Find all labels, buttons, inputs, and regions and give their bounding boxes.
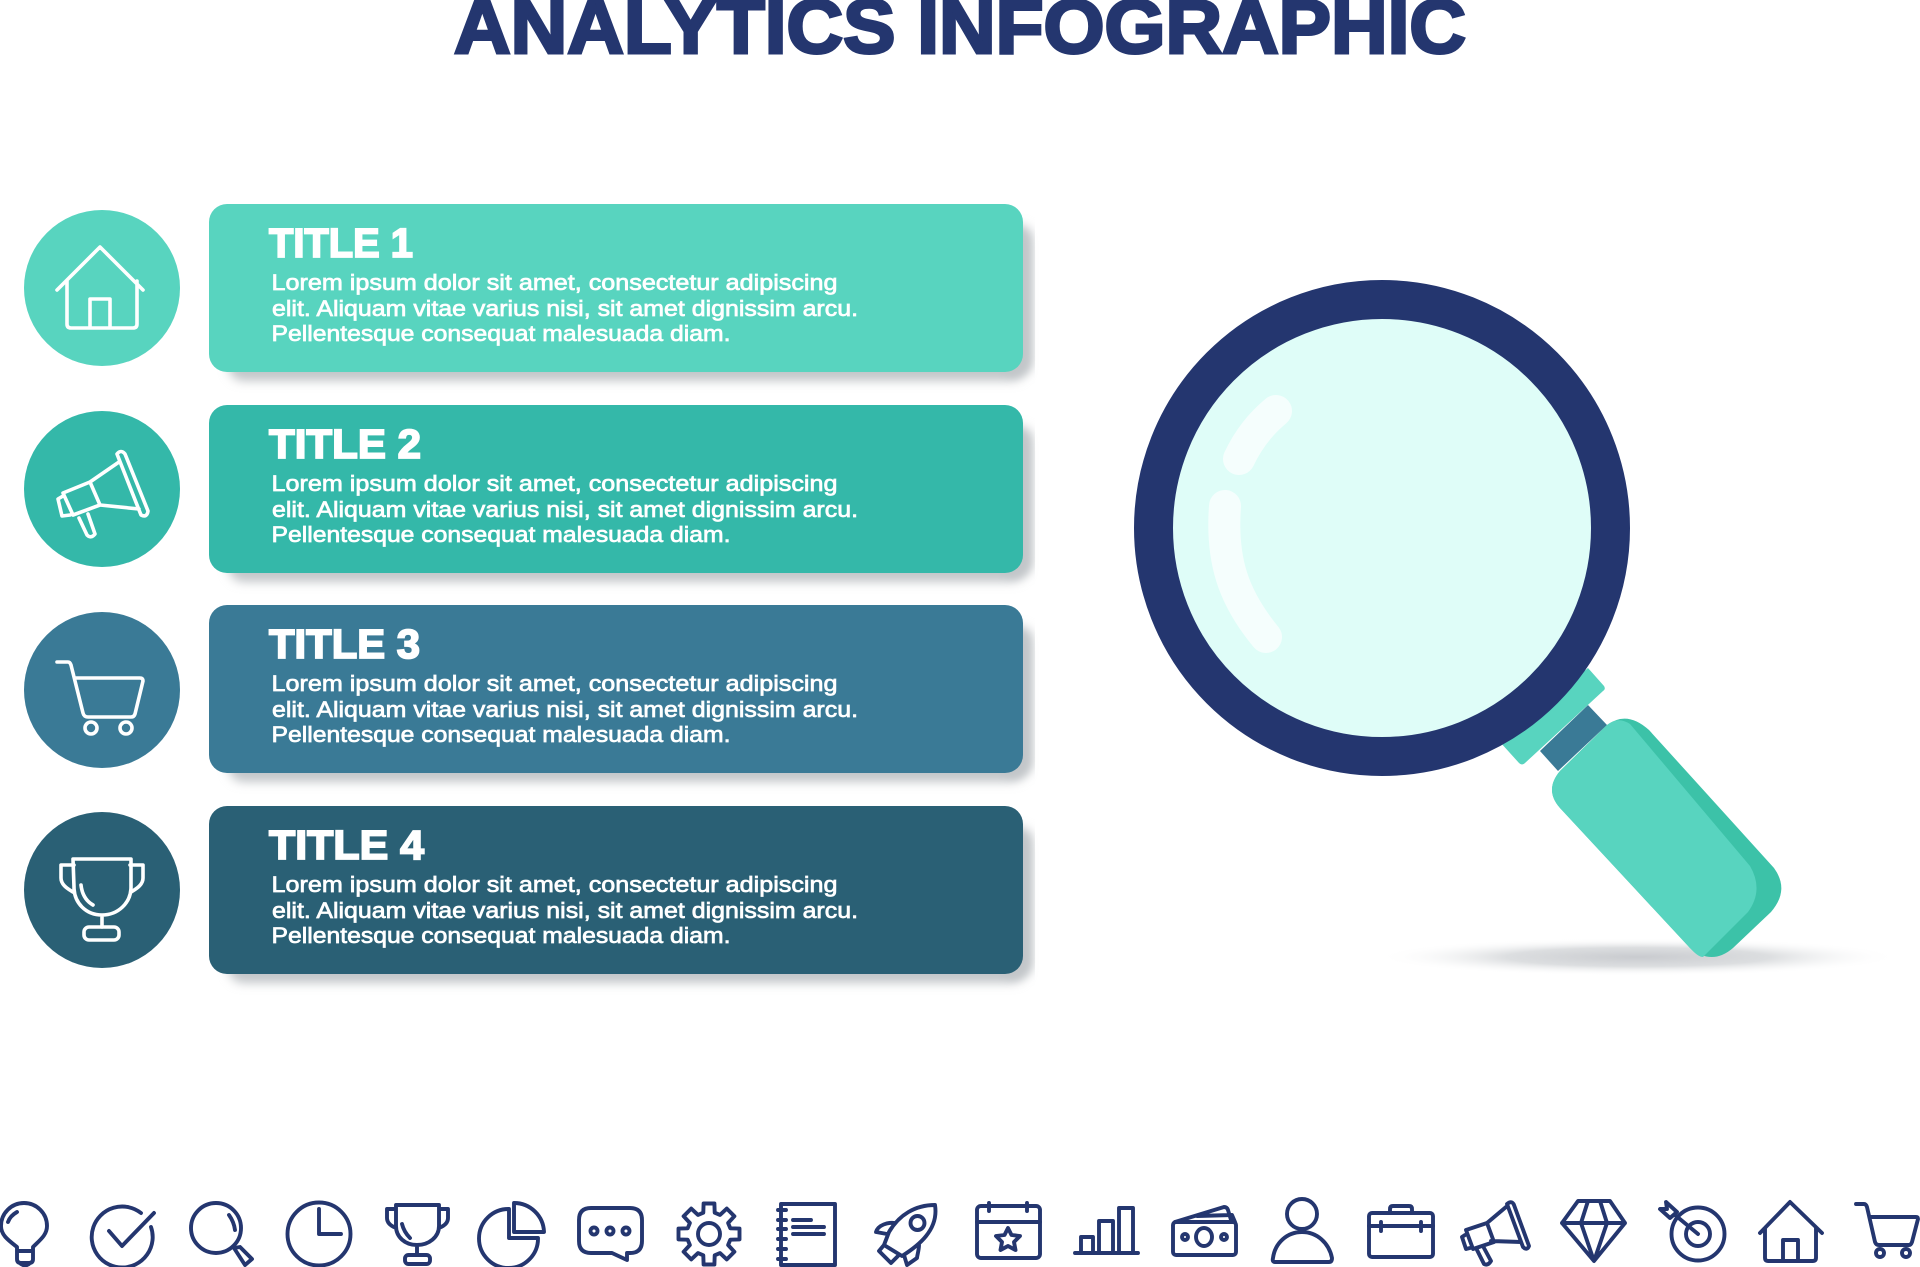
panel: title 2 row bbox=[24, 405, 1033, 582]
panel: title 1 row: Lorem ipsum dolor sit amet, consectetur adipiscing bbox=[272, 270, 838, 295]
icon: money bbox=[1173, 1207, 1236, 1255]
panel: title 1 row: TITLE 1 bbox=[269, 220, 413, 266]
magnifier collar bbox=[1500, 668, 1605, 764]
panel: title 3 row: Lorem ipsum dolor sit amet, consectetur adipiscing bbox=[272, 671, 838, 696]
icon: trophy outline bbox=[387, 1205, 448, 1264]
panel: title 1 row: elit. Aliquam vitae varius nisi, sit amet dignissim arcu. bbox=[272, 296, 858, 321]
icon row bbox=[1, 1199, 1918, 1267]
lens highlights bbox=[1224, 411, 1276, 637]
panel: title 3 row: Pellentesque consequat malesuada diam. bbox=[272, 722, 730, 747]
icon: pie chart bbox=[479, 1203, 544, 1267]
panel: title 3 row: TITLE 3 bbox=[269, 621, 420, 667]
panel: title 4 row: TITLE 4 bbox=[269, 822, 424, 868]
magnifier ring and lens bbox=[1154, 300, 1610, 756]
panel: title 3 row bbox=[24, 605, 1033, 782]
panel: title 2 row: Pellentesque consequat malesuada diam. bbox=[272, 522, 730, 547]
icon: shopping cart bbox=[57, 662, 143, 734]
icon: rocket bbox=[876, 1205, 935, 1265]
magnifier handle bbox=[1552, 719, 1781, 957]
icon: speech bubble bbox=[579, 1208, 642, 1260]
panel: title 4 row: elit. Aliquam vitae varius nisi, sit amet dignissim arcu. bbox=[272, 898, 858, 923]
icon: cart outline bbox=[1856, 1204, 1918, 1257]
panel: title 2 row: TITLE 2 bbox=[269, 421, 421, 467]
panel: title 2 row: elit. Aliquam vitae varius nisi, sit amet dignissim arcu. bbox=[272, 497, 858, 522]
icon: notebook bbox=[778, 1204, 835, 1265]
icon: light bulb bbox=[1, 1203, 47, 1266]
icon: check circle bbox=[92, 1207, 154, 1267]
icon: calendar star bbox=[977, 1203, 1040, 1258]
icon: target bbox=[1660, 1202, 1724, 1260]
icon: diamond bbox=[1562, 1201, 1625, 1261]
icon: search bbox=[191, 1203, 252, 1265]
icon: gear bbox=[678, 1204, 740, 1264]
icon: house outline bbox=[1760, 1202, 1822, 1261]
icon: megaphone outline bbox=[1462, 1202, 1529, 1265]
icon: megaphone bbox=[58, 452, 148, 537]
icon: bar chart bbox=[1075, 1208, 1138, 1253]
panel: title 2 row: Lorem ipsum dolor sit amet, consectetur adipiscing bbox=[272, 471, 838, 496]
magnifying glass bbox=[1154, 300, 1900, 976]
panel: title 1 row: Pellentesque consequat malesuada diam. bbox=[272, 321, 730, 346]
icon: briefcase bbox=[1369, 1206, 1433, 1257]
panel: title 4 row: Pellentesque consequat malesuada diam. bbox=[272, 923, 730, 948]
panel: title 4 row bbox=[24, 806, 1033, 983]
icon: clock bbox=[288, 1202, 350, 1266]
magnifier neck bbox=[1540, 705, 1607, 771]
icon: trophy bbox=[61, 859, 143, 940]
ground shadow bbox=[1376, 938, 1900, 976]
panel: title 4 row: Lorem ipsum dolor sit amet, consectetur adipiscing bbox=[272, 872, 838, 897]
panel: title 3 row: elit. Aliquam vitae varius nisi, sit amet dignissim arcu. bbox=[272, 697, 858, 722]
panel: title 1 row bbox=[24, 204, 1033, 381]
icon: house bbox=[57, 247, 143, 328]
icon: person bbox=[1273, 1199, 1332, 1262]
